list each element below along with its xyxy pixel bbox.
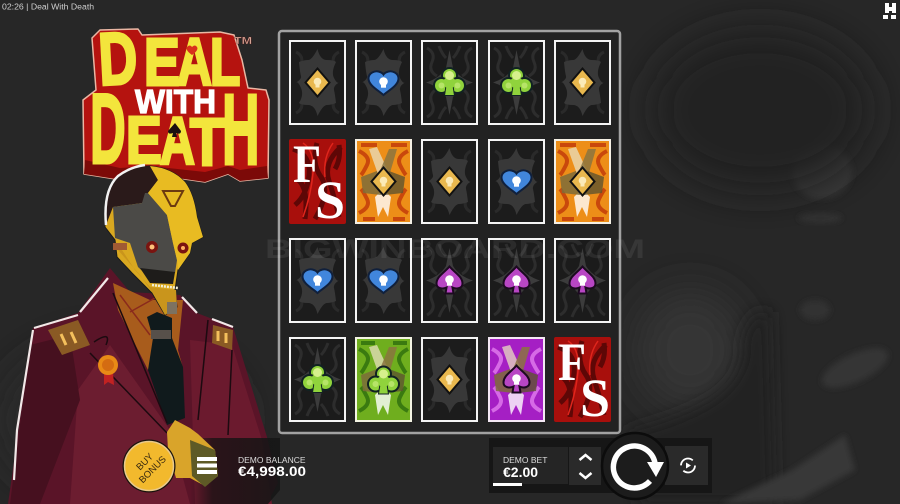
demo bet [493, 447, 568, 486]
logo word: DEATH: D [90, 73, 126, 185]
tie [147, 312, 185, 425]
white highlights [14, 278, 233, 480]
logo word: DEAL: A [177, 25, 212, 100]
card: spade [555, 239, 610, 322]
trademark: TM [234, 36, 252, 47]
logo word: DEATH [90, 73, 260, 185]
card: diamond [422, 140, 477, 223]
balance: DEMO BALANCE [238, 455, 306, 465]
panel: balance bar [122, 420, 306, 504]
icon: golden hand [167, 420, 218, 486]
card: purple wild spade [489, 338, 544, 421]
logo: Deal With Death [83, 17, 269, 185]
logo word: DEAL: E [144, 24, 180, 99]
card: spade [489, 239, 544, 322]
card: heart [356, 41, 411, 124]
card: orange wild diamond [555, 140, 610, 223]
logo word: WITH: WITH [135, 83, 216, 120]
button: buy bonus: BUY [134, 451, 156, 473]
lapel lines [90, 293, 232, 435]
card: club [489, 41, 544, 124]
autoplay [665, 446, 708, 485]
logo word: DEAL [97, 17, 240, 101]
character: skeleton in red suit [8, 165, 278, 504]
row 4 [290, 332, 611, 428]
card: free spins: F [293, 134, 321, 194]
icon: heart and spade on logo [187, 46, 197, 55]
card: free spins: S [580, 368, 610, 428]
card: spade [422, 239, 477, 322]
logo word: DEAL: L [210, 26, 240, 100]
card: heart [356, 239, 411, 322]
button: buy bonus [122, 440, 176, 492]
logo word: DEATH: A [160, 104, 195, 179]
spin button [602, 433, 668, 499]
status bar text: 02:26 | Deal With Death [2, 2, 94, 12]
card: free spins [289, 134, 346, 230]
card: club [290, 338, 345, 421]
icon: menu [197, 457, 217, 474]
logo word: DEATH: E [126, 102, 162, 177]
jacket [8, 268, 278, 504]
demo bet: DEMO BET [503, 455, 547, 465]
watermark: BIGWINBOARD.COM [265, 234, 645, 264]
icon: provider logo [883, 3, 896, 19]
head [105, 166, 203, 315]
row 3 [290, 239, 610, 322]
shoulder patches [48, 320, 90, 355]
logo backing [83, 29, 269, 182]
medal [104, 372, 114, 385]
bet arrows [569, 447, 601, 485]
card: diamond [555, 41, 610, 124]
panel: bet and spin controls [489, 433, 712, 499]
card: free spins: S [315, 170, 345, 230]
balance [238, 455, 306, 479]
card: club [422, 41, 477, 124]
row 2 [289, 134, 610, 230]
balance: €4,998.00 [238, 463, 306, 479]
demo bet: €2.00 [503, 464, 538, 480]
card: diamond [290, 41, 345, 124]
card: free spins: F [558, 332, 586, 392]
button: buy bonus: BONUS [137, 454, 169, 486]
card: diamond [422, 338, 477, 421]
card: heart [489, 140, 544, 223]
card: orange wild diamond [356, 140, 411, 223]
card: heart [290, 239, 345, 322]
logo word: DEAL: D [97, 17, 139, 101]
orange shirt [113, 283, 183, 370]
logo word: DEATH: H [222, 74, 260, 185]
card: free spins [554, 332, 611, 428]
row 1 [290, 41, 610, 124]
logo word: DEATH: T [190, 105, 225, 180]
panel: reel frame [279, 31, 620, 433]
card: green wild club [356, 338, 411, 421]
